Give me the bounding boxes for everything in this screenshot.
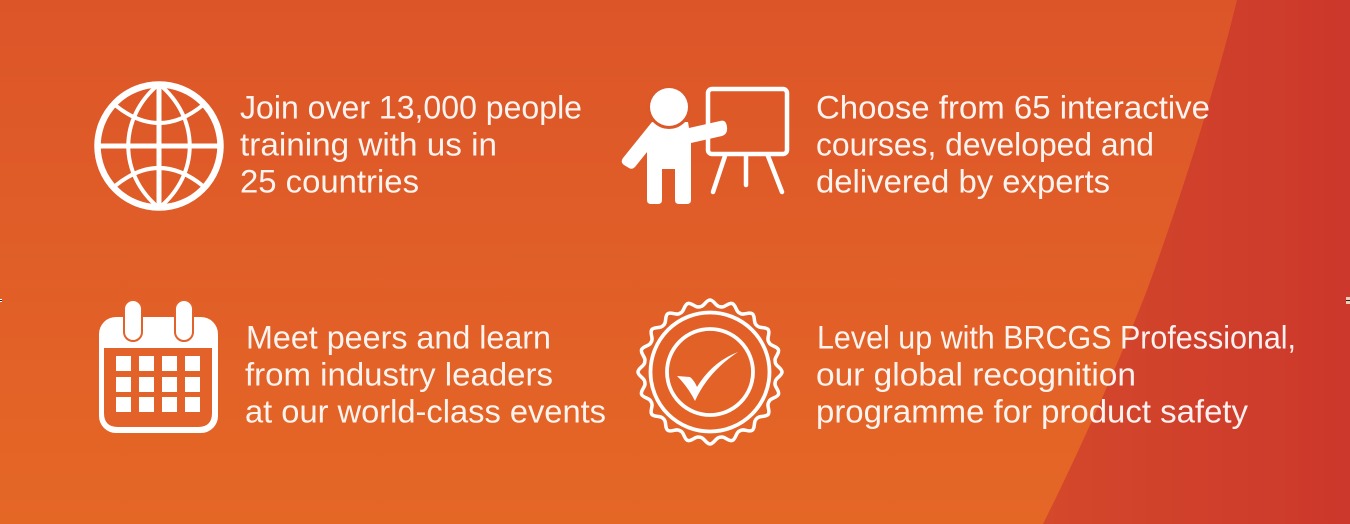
crop mark right	[1346, 297, 1350, 304]
check mark	[677, 352, 738, 401]
icon: calendar	[99, 300, 218, 433]
icon: teacher at board	[622, 85, 787, 204]
text: courses: courses, developed and	[816, 126, 1154, 162]
text: courses	[816, 90, 1210, 200]
teacher figure	[622, 85, 727, 204]
scalloped edge	[638, 300, 782, 444]
text: recognition	[816, 320, 1296, 430]
red curved panel	[1043, 0, 1350, 524]
text: events: at our world-class events	[245, 394, 606, 430]
icon: certification badge	[638, 300, 782, 444]
text: courses: delivered by experts	[816, 164, 1110, 200]
text: join	[240, 90, 582, 200]
text: recognition: Level up with BRCGS Professional,	[817, 320, 1296, 356]
text: join: training with us in	[240, 126, 497, 162]
text: join: Join over 13,000 people	[240, 90, 582, 126]
icon: globe	[98, 84, 220, 208]
presentation board	[708, 89, 787, 192]
text: courses: Choose from 65 interactive	[816, 90, 1210, 126]
text: events: from industry leaders	[245, 356, 553, 392]
badge rings	[650, 312, 770, 432]
text: join: 25 countries	[240, 164, 419, 200]
text: events	[245, 320, 606, 430]
crop mark left	[0, 299, 2, 302]
text: recognition: our global recognition	[816, 356, 1136, 392]
text: recognition: programme for product safety	[816, 394, 1248, 430]
text: events: Meet peers and learn	[246, 320, 551, 356]
